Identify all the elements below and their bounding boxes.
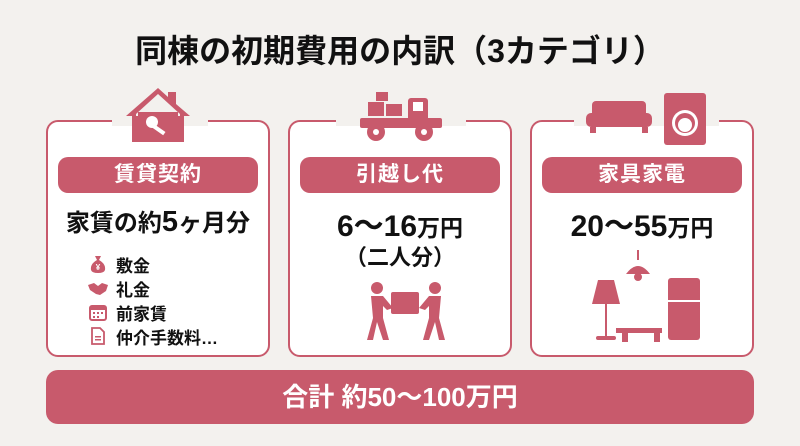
heading: moving xyxy=(300,157,500,193)
list of items xyxy=(88,256,218,348)
text: 20-55万円: 20〜55万円 xyxy=(571,210,713,243)
heading: rental contract xyxy=(58,157,258,193)
heading: furniture xyxy=(542,157,742,193)
panel: rental contract xyxy=(46,120,270,357)
list of items: 前家賃 xyxy=(116,304,167,324)
panel: furniture/appliances xyxy=(530,120,754,357)
icon: house with key xyxy=(126,88,190,142)
heading: moving: 引越し代 xyxy=(356,163,444,186)
icon: two people carrying box xyxy=(367,282,445,340)
text: 5 months rent: 家賃の約5ヶ月分 xyxy=(66,206,250,238)
text: two people: （二人分） xyxy=(345,245,455,270)
list of items: ¥ xyxy=(96,263,101,272)
icon: lamp table fridge xyxy=(592,250,700,342)
icon: sofa and washer xyxy=(586,93,706,145)
title: 同棟の初期費用の内訳（3カテゴリ） xyxy=(135,33,665,69)
list of items: 仲介手数料… xyxy=(116,328,218,348)
panel: moving cost xyxy=(288,120,512,357)
total bar xyxy=(46,370,754,424)
text: 6-16万円: 6〜16万円 xyxy=(337,210,463,243)
icon: truck xyxy=(360,92,442,141)
heading: rental contract: 賃貸契約 xyxy=(114,163,202,186)
list of items: 礼金 xyxy=(116,280,150,300)
list of items: 敷金 xyxy=(116,256,150,276)
total bar: 合計 約50〜100万円 xyxy=(282,382,518,412)
heading: furniture: 家具家電 xyxy=(598,163,686,186)
